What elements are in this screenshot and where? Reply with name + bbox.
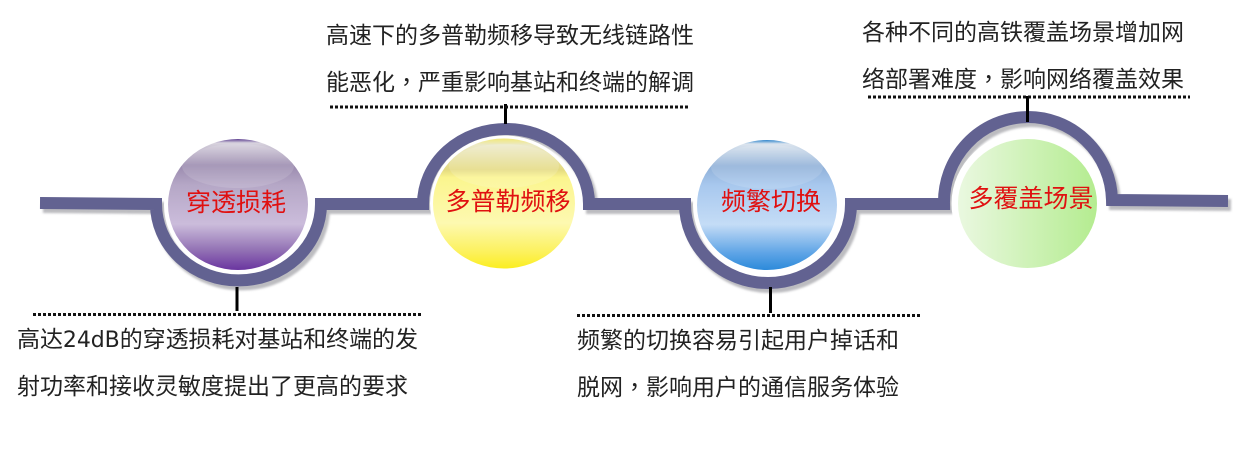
text: penetration loss: 高达24dB的穿透损耗对基站和终端的发 — [17, 326, 418, 353]
text: Doppler shift: 能恶化，严重影响基站和终端的解调 — [326, 63, 694, 97]
text: frequent handover: 脱网，影响用户的通信服务体验 — [577, 368, 899, 402]
connector and dotted rule: bottom middle — [577, 287, 920, 316]
label: 多覆盖场景: 多覆盖场景 — [968, 185, 1094, 213]
text: penetration loss: 射功率和接收灵敏度提出了更高的要求 — [17, 373, 408, 399]
text: Doppler shift: 高速下的多普勒频移导致无线链路性 — [326, 22, 694, 48]
label: 穿透损耗: 穿透损耗 — [186, 189, 286, 217]
text: frequent handover: 频繁的切换容易引起用户掉话和 — [577, 327, 899, 353]
label: 多普勒频移: 多普勒频移 — [445, 188, 571, 216]
timeline ribbon — [40, 117, 1231, 287]
sphere: 多普勒频移 — [430, 136, 578, 272]
text: frequent handover — [577, 327, 899, 402]
sphere: 频繁切换 — [693, 136, 841, 274]
label: 频繁切换: 频繁切换 — [721, 188, 821, 216]
sphere: 穿透损耗 — [164, 136, 312, 274]
connector and dotted rule: top right — [868, 96, 1190, 122]
text: multiple coverage scenarios: 络部署难度，影响网络覆盖效果 — [862, 60, 1184, 94]
text: penetration loss — [17, 326, 418, 399]
sphere: 多覆盖场景 — [952, 132, 1104, 276]
connector and dotted rule: top middle — [330, 104, 688, 124]
text: Doppler shift — [326, 22, 694, 97]
connector and dotted rule: bottom left — [33, 287, 421, 314]
text: multiple coverage scenarios: 各种不同的高铁覆盖场景增加网 — [862, 19, 1184, 45]
text: multiple coverage scenarios — [862, 19, 1184, 94]
